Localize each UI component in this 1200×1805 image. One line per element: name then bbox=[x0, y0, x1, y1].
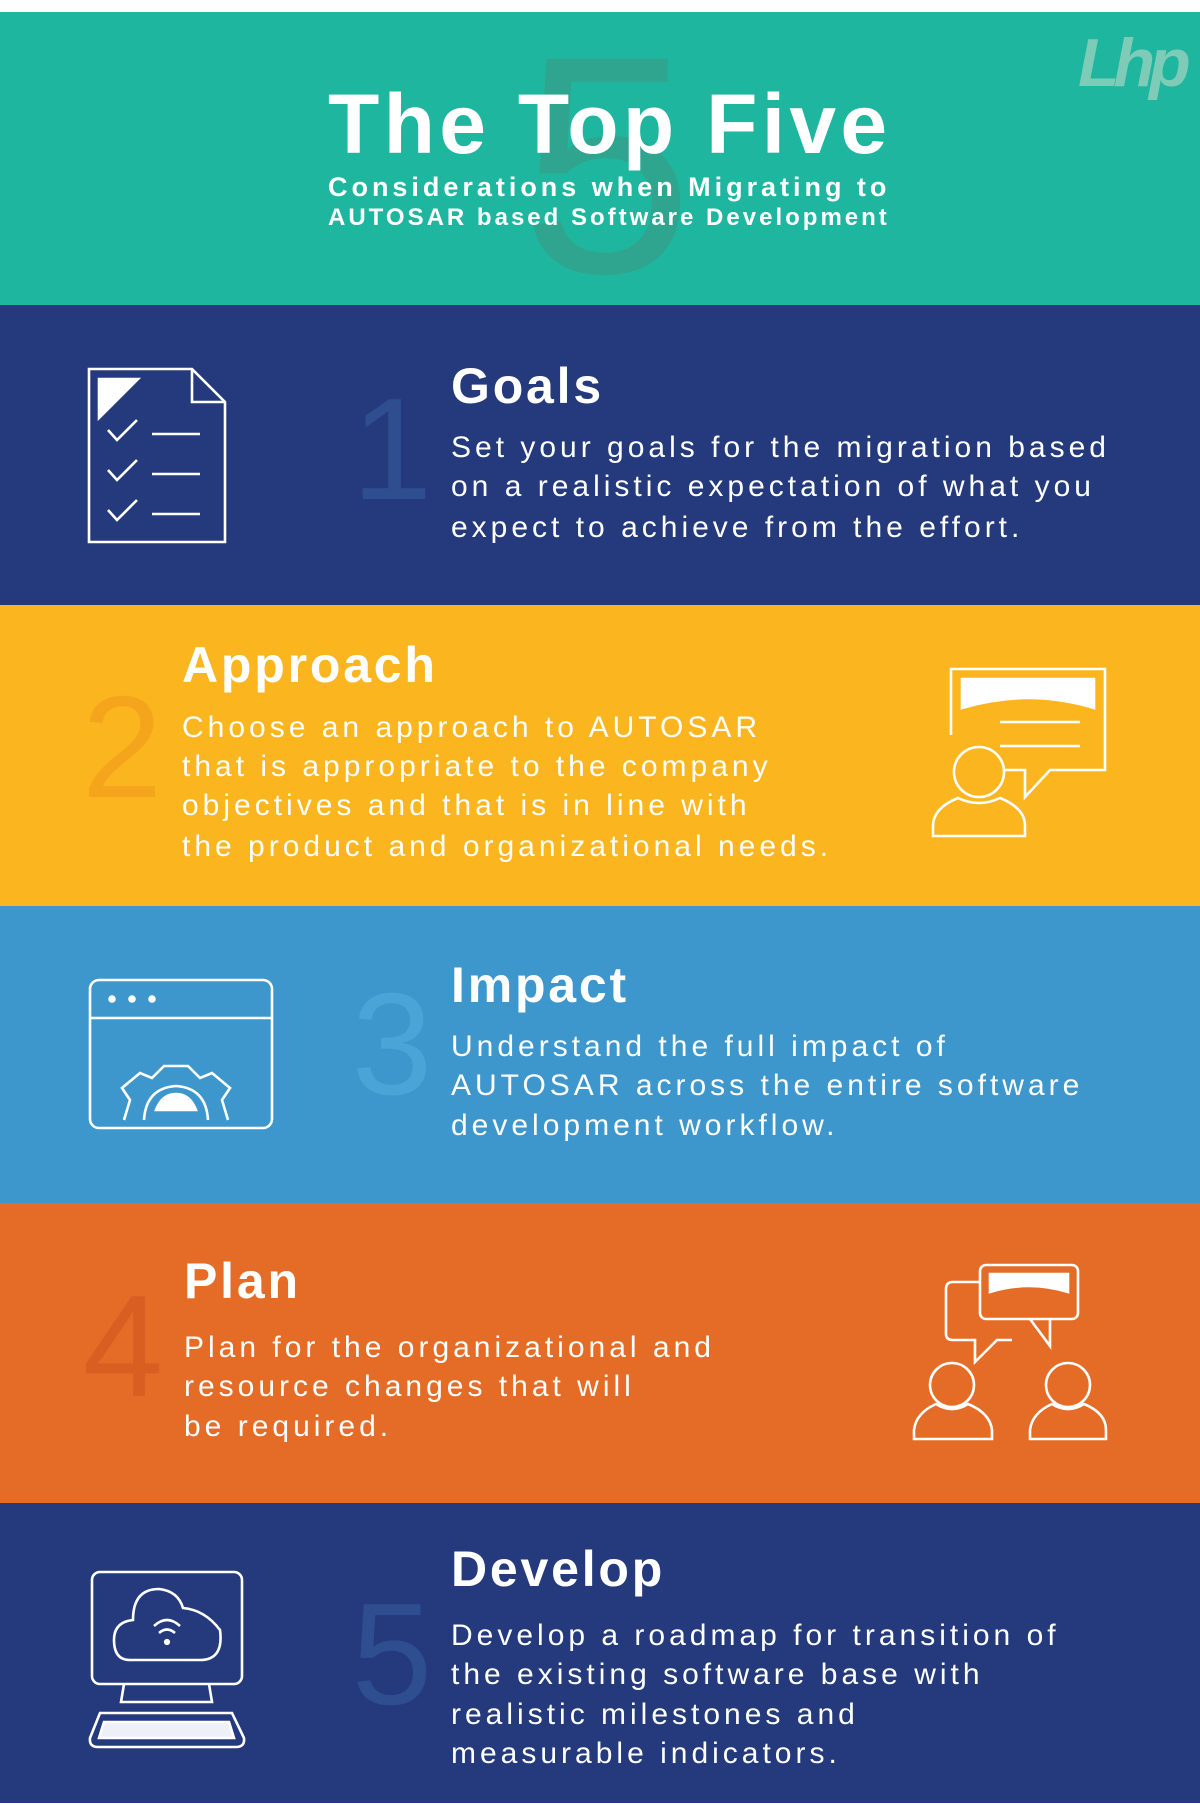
text: develop bbox=[451, 1619, 1060, 1770]
text: approach: objectives and that is in line with bbox=[182, 789, 751, 822]
panel: header: AUTOSAR based Software Development bbox=[328, 204, 888, 231]
text: goals bbox=[451, 431, 1110, 544]
text: develop: the existing software base with bbox=[451, 1658, 984, 1691]
subtitle: Considerations when Migrating to bbox=[328, 172, 888, 202]
text: impact: AUTOSAR across the entire software bbox=[451, 1069, 1083, 1102]
text: develop: Develop a roadmap for transition of bbox=[451, 1619, 1060, 1652]
text: develop: measurable indicators. bbox=[451, 1737, 841, 1770]
text: develop: realistic milestones and bbox=[451, 1698, 859, 1731]
text: impact: development workflow. bbox=[451, 1109, 838, 1142]
number 1: 1 bbox=[352, 368, 432, 530]
text: plan: be required. bbox=[184, 1410, 392, 1443]
text: plan: Plan for the organizational and bbox=[184, 1331, 715, 1364]
panel: header bbox=[0, 0, 1200, 338]
text: impact bbox=[451, 1030, 1083, 1142]
text: approach: Choose an approach to AUTOSAR bbox=[182, 711, 761, 744]
text: approach: that is appropriate to the company bbox=[182, 750, 772, 783]
panel: impact bbox=[0, 906, 1200, 1203]
text: plan bbox=[184, 1331, 715, 1443]
number 2: 2 bbox=[82, 666, 162, 828]
heading: Approach: Approach bbox=[182, 637, 438, 693]
text: goals: Set your goals for the migration based bbox=[451, 431, 1110, 464]
heading: Impact: Impact bbox=[451, 957, 629, 1013]
panel: approach bbox=[0, 605, 1200, 906]
icon: checklist document bbox=[89, 369, 225, 542]
text: approach: the product and organizational needs. bbox=[182, 830, 832, 863]
icon: presenter with speech bubble bbox=[933, 669, 1105, 836]
big background number 5: 5 bbox=[521, 0, 693, 338]
icon: two people talking bbox=[914, 1265, 1106, 1439]
icon: browser window with gear bbox=[90, 980, 272, 1128]
number 3: 3 bbox=[352, 963, 432, 1125]
panel: plan bbox=[0, 1203, 1200, 1503]
logo: Lhp bbox=[1078, 25, 1189, 101]
text: goals: on a realistic expectation of what you bbox=[451, 470, 1095, 503]
text: approach bbox=[182, 711, 832, 863]
heading: Goals: Goals bbox=[451, 358, 604, 414]
icon: computer with cloud bbox=[90, 1572, 244, 1747]
panel: goals bbox=[0, 305, 1200, 605]
number 4: 4 bbox=[83, 1265, 163, 1427]
number 5: 5 bbox=[352, 1573, 432, 1735]
text: goals: expect to achieve from the effort. bbox=[451, 511, 1023, 544]
panel: develop bbox=[0, 1503, 1200, 1803]
heading: Develop: Develop bbox=[451, 1541, 665, 1597]
title: The Top Five bbox=[328, 77, 891, 171]
heading: Plan: Plan bbox=[184, 1253, 301, 1309]
text: impact: Understand the full impact of bbox=[451, 1030, 949, 1063]
text: plan: resource changes that will bbox=[184, 1370, 635, 1403]
